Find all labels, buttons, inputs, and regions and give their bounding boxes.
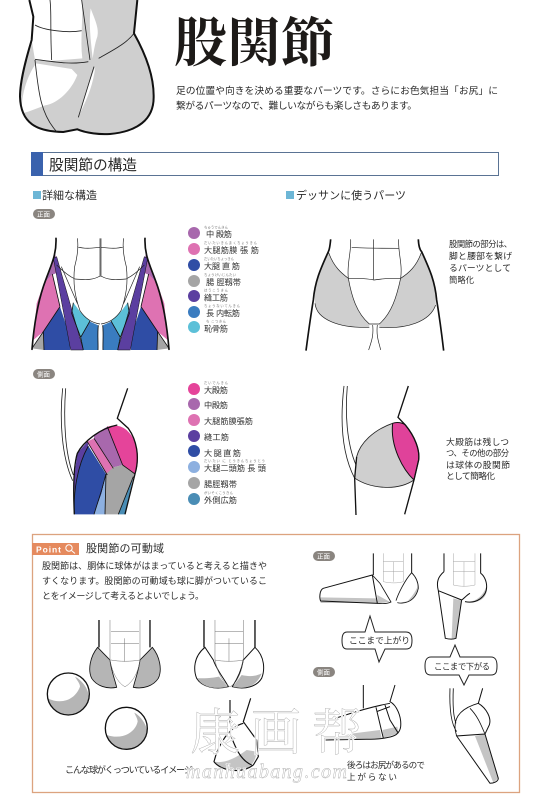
subheading: detailed structure: 詳細な構造	[42, 188, 97, 202]
intro text: 足の位置や向きを決める重要なパーツです。さらにお色気担当「お尻」に	[176, 84, 498, 97]
sphere caption: こんな球がくっついているイメージ	[65, 764, 193, 775]
legend: front muscles: 大腿 直 筋	[204, 261, 240, 271]
badge: front view: 正面	[37, 210, 50, 218]
legend: side muscles: がいそくこうきん	[204, 490, 234, 495]
section heading bar	[31, 152, 498, 176]
callout: lowered limit: ここまで下がる	[434, 662, 490, 672]
point body text: すくなります。股関節の可動域も球に脚がついているこ	[42, 575, 267, 586]
legend: front muscles: 腸 脛靱帯	[206, 277, 241, 287]
point badge: Point	[36, 544, 61, 554]
legend: side muscles: 大腿筋膜張筋	[204, 416, 253, 426]
annotation: buttocks limit	[347, 759, 425, 782]
point body text: 股関節は、胴体に球体がはまっていると考えると描きや	[42, 560, 267, 571]
left sphere	[47, 673, 89, 715]
leg raised front figure	[320, 553, 418, 604]
legend: side muscles: だいたい に とうきんちょうとう	[204, 458, 265, 463]
legend: front muscles: だいたいちょっきん	[204, 256, 235, 261]
annotation: side simplification: として簡略化	[446, 470, 495, 481]
legend: side muscles: 腸脛靱帯	[204, 479, 237, 489]
legend: side muscles: 大腿直筋	[204, 448, 241, 458]
legend: front muscles: ち こつきん	[206, 318, 227, 324]
legend: side muscles: 大腿二頭筋 長 頭	[204, 463, 266, 473]
watermark: manhuabang.com	[186, 761, 347, 783]
point body text	[42, 560, 267, 601]
badge: side view: 側面	[37, 370, 50, 378]
legend: side muscles: だいでんきん	[204, 380, 229, 385]
point heading: 股関節の可動域	[86, 541, 164, 555]
leg lowered front figure	[437, 553, 487, 639]
legend: front muscles: 恥骨筋	[204, 324, 228, 334]
badge: raised side	[313, 667, 335, 677]
annotation: buttocks limit: 上がらない	[347, 771, 397, 782]
badge: raised side: 側面	[317, 668, 330, 676]
annotation: front simplification: 股関節の部分は、	[449, 239, 512, 249]
hip figure with white spheres	[195, 620, 264, 688]
point body text: とをイメージして考えるとよいでしょう。	[42, 591, 204, 601]
leg lowered side figure	[450, 688, 498, 783]
annotation: front simplification: 簡略化	[449, 275, 475, 285]
annotation: front simplification: 脚と腰部を繋げ	[449, 250, 512, 261]
annotation: side simplification: つ、その他の部分	[446, 448, 510, 458]
annotation: side simplification: 大殿筋は残しつ	[446, 436, 509, 447]
legend: front muscles: 縫工筋	[204, 292, 228, 302]
legend: front muscles	[188, 224, 259, 334]
hip figure with grey spheres	[90, 620, 160, 688]
leg raised side figure	[325, 685, 401, 740]
legend: side muscles	[188, 380, 266, 505]
legend: side muscles: 大殿筋	[204, 385, 228, 395]
badge: front view	[33, 209, 55, 219]
front simplified diagram	[306, 239, 444, 351]
legend: front muscles: ほうこうきん	[204, 288, 229, 292]
annotation: front simplification	[449, 239, 512, 285]
side sphere figure	[214, 698, 258, 771]
legend: front muscles: ちょうけいじんたい	[204, 272, 237, 277]
section heading bar: 股関節の構造	[49, 157, 137, 174]
callout: raised limit	[342, 616, 412, 662]
side simplified diagram	[342, 386, 419, 515]
annotation: side simplification: は球体の股関節	[446, 459, 510, 470]
legend: side muscles: 縫工筋	[204, 432, 229, 442]
badge: raised front: 正面	[317, 552, 330, 560]
badge: raised front	[313, 551, 335, 561]
legend: side muscles: 外側広筋	[204, 495, 237, 505]
annotation: buttocks limit: 後ろはお尻があるので	[347, 759, 425, 770]
side muscle diagram	[61, 388, 138, 514]
annotation: side simplification	[446, 436, 510, 481]
legend: front muscles: 大腿筋膜 張 筋	[204, 245, 259, 255]
badge: side view	[33, 369, 55, 379]
legend: front muscles: ちゅうでんきん	[204, 224, 229, 230]
annotation: front simplification: るパーツとして	[449, 263, 511, 273]
callout: lowered limit	[425, 645, 497, 685]
legend: front muscles: 長 内転筋	[206, 308, 240, 318]
watermark: 康画帮	[190, 705, 362, 761]
legend: side muscles: 中殿筋	[204, 400, 228, 410]
right sphere	[105, 707, 147, 749]
watermark: manhuabang.com	[186, 761, 347, 783]
subheading: parts for drawing: デッサンに使うパーツ	[296, 188, 406, 202]
legend: front muscles: ちょうないてんきん	[204, 303, 241, 308]
figure: torso illustration at top	[20, 0, 154, 134]
intro text	[176, 84, 498, 112]
watermark: 康画帮	[190, 705, 362, 761]
front muscle diagram	[32, 238, 169, 350]
point badge	[32, 543, 79, 555]
intro text: 繋がるパーツなので、難しいながらも楽しさもあります。	[176, 99, 417, 112]
title: 股関節	[174, 14, 334, 73]
legend: front muscles: 中 殿筋	[206, 229, 232, 239]
callout: raised limit: ここまで上がり	[349, 634, 410, 646]
panel: point range of motion	[32, 534, 520, 792]
legend: front muscles: だいたいきんまくちょうきん	[204, 240, 258, 245]
